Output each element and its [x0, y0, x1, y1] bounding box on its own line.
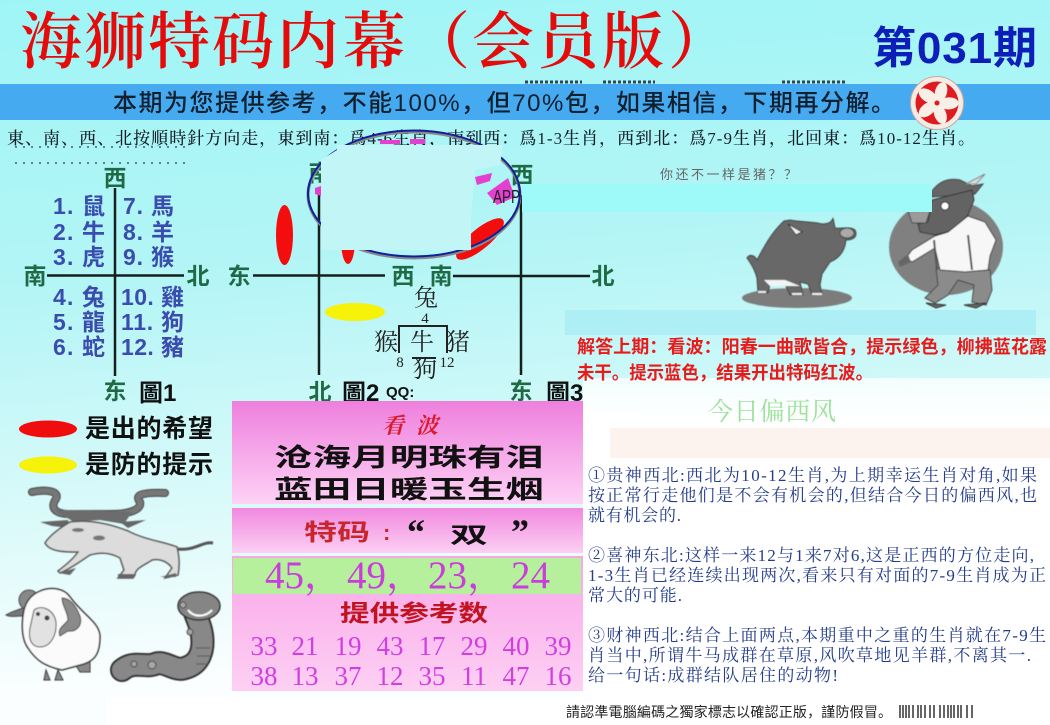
zodiac list: 12. 豬 [121, 334, 184, 360]
icon: sheep [6, 589, 100, 680]
reference numbers: 43 [376, 631, 404, 661]
analysis text block [588, 466, 1046, 685]
pig caption: 你还不一样是猪？？ [660, 167, 797, 182]
panel: special code: 特码 [304, 519, 370, 545]
paragraph 3: 给一句话:成群结队居住的动物! [588, 666, 838, 685]
figures 2 and 3: crosshairs: 圖3 [546, 380, 583, 407]
reference numbers: 37 [334, 661, 362, 691]
panel: numbers [232, 554, 583, 691]
small zodiac diagram: 8 [396, 355, 404, 371]
zodiac list: 6. 蛇 [53, 334, 105, 360]
figure captions: 圖2 [342, 380, 379, 407]
small zodiac diagram: 4 [421, 311, 429, 327]
reference heading: 提供参考数 [340, 600, 488, 626]
previous answer: 未干。提示蓝色，结果开出特码红波。 [577, 362, 873, 383]
paragraph 2 [588, 546, 1046, 605]
cross labels: 南 [430, 263, 452, 289]
red and yellow markers [276, 205, 509, 321]
blue banner [0, 84, 1050, 120]
reference numbers: 40 [502, 631, 530, 661]
panel: special code: ” [511, 512, 529, 552]
paragraph 1: 就有机会的. [588, 506, 681, 525]
zodiac list [53, 193, 184, 360]
reference numbers: 33 [250, 631, 278, 661]
icon: wild boar [742, 218, 856, 308]
panel: numbers: 23， [428, 554, 506, 597]
reference numbers: 38 [250, 661, 278, 691]
reference numbers: 17 [418, 631, 446, 661]
panel: numbers: 24 [511, 554, 550, 597]
cyan patches [522, 184, 932, 212]
paragraph 2: 1-3生肖已经连续出现两次,看来只有对面的7-9生肖成为正 [588, 566, 1046, 585]
small zodiac diagram [374, 285, 470, 383]
previous answer [577, 336, 1047, 383]
icon: pig man [889, 174, 1003, 308]
cross labels: 西 [392, 263, 414, 289]
panel: special code [232, 508, 583, 553]
reference numbers: 39 [544, 631, 572, 661]
reference numbers: 21 [292, 631, 318, 661]
paragraph 1: 按正常行走他们是不会有机会的,但结合今日的偏西风,也 [588, 486, 1037, 505]
legend [19, 415, 213, 479]
zodiac list: 5. 龍 [53, 309, 105, 335]
banner text: 本期为您提供参考，不能100%，但70%包，如果相信，下期再分解。 [113, 90, 895, 117]
paragraph 2: ②喜神东北:这样一来12与1来7对6,这是正西的方位走向, [588, 546, 1034, 565]
compass labels [24, 165, 210, 404]
panel: numbers: 49， [347, 554, 425, 597]
zodiac list: 9. 猴 [123, 244, 174, 270]
zodiac list: 11. 狗 [121, 309, 184, 335]
zodiac list: 3. 虎 [53, 244, 105, 270]
legend: 是防的提示 [85, 451, 213, 479]
reference numbers: 19 [334, 631, 362, 661]
figures 2 and 3: crosshairs [228, 160, 614, 407]
reference numbers: 47 [502, 661, 530, 691]
title: 海狮特码内幕（会员版） [20, 9, 730, 77]
reference numbers: 35 [418, 661, 446, 691]
cross labels: 西 [510, 162, 534, 188]
reference numbers: 29 [460, 631, 488, 661]
zodiac list: 7. 馬 [123, 193, 174, 219]
poem heading: 看波 [382, 413, 441, 438]
reference numbers: 13 [292, 661, 318, 691]
compass labels: 北 [186, 263, 210, 289]
poem lines: 沧海月明珠有泪 [274, 443, 544, 472]
zodiac list: 4. 兔 [53, 284, 105, 310]
small zodiac diagram: 猴 [374, 329, 398, 356]
small zodiac diagram: 牛 [410, 329, 434, 356]
panel: numbers: 45， [265, 554, 343, 597]
small zodiac diagram: 12 [440, 355, 454, 371]
paragraph 3: 肖当中,所谓牛马成群在草原,风吹草地见羊群,不离其一. [588, 645, 1031, 665]
reference numbers: 16 [544, 661, 572, 691]
panel: special code: : [383, 520, 390, 545]
cross labels: 北 [592, 263, 614, 289]
stamp ellipse with cover [308, 130, 520, 258]
issue number: 第031期 [872, 24, 1037, 73]
analysis heading: 今日偏西风 [708, 398, 836, 426]
legend: 是出的希望 [85, 415, 213, 443]
panel: special code: 双 [450, 523, 488, 548]
figures 2 and 3: crosshairs: QQ: [386, 384, 414, 401]
paragraph 3: ③财神西北:结合上面两点,本期重中之重的生肖就在7-9生 [588, 626, 1046, 645]
icon: snake [122, 592, 220, 670]
previous answer: 解答上期：看波：阳春一曲歌皆合，提示绿色，柳拂蓝花露 [577, 336, 1047, 357]
panel: poem [232, 401, 583, 504]
panel: poem: 蓝田日暖玉生烟 [274, 476, 544, 504]
stamp fragments [315, 139, 515, 205]
compass labels: 西 [104, 165, 126, 191]
zodiac list: 8. 羊 [123, 219, 174, 245]
paragraph 2: 常大的可能. [588, 586, 682, 605]
compass labels: 南 [24, 263, 46, 289]
figure 1: zodiac compass [24, 165, 210, 407]
stamp ellipse with cover: APP [493, 187, 520, 207]
zodiac list: 2. 牛 [53, 219, 105, 245]
pale band [610, 428, 1050, 458]
panel: special code: “ [407, 512, 425, 552]
icon: bull [32, 491, 213, 578]
cross labels: 北 [308, 379, 332, 405]
cross labels: 南 [308, 160, 332, 186]
paragraph 1 [588, 466, 1037, 525]
small zodiac diagram: 兔 [414, 285, 438, 312]
reference numbers [250, 631, 572, 691]
icon: Hong Kong emblem [910, 76, 964, 130]
barcode [900, 705, 972, 718]
paragraph 1: ①贵神西北:西北为10-12生肖,为上期幸运生肖对角,如果 [588, 466, 1037, 485]
small zodiac diagram: 猪 [446, 329, 470, 356]
cross labels [228, 160, 614, 405]
main numbers [233, 558, 581, 594]
cross labels: 东 [510, 378, 532, 404]
figure 1 caption: 圖1 [139, 380, 176, 407]
paragraph 3 [588, 626, 1046, 685]
small zodiac diagram: 狗 [413, 356, 437, 383]
zodiac list: 10. 雞 [121, 284, 184, 310]
zodiac list: 1. 鼠 [53, 193, 105, 219]
reference numbers: 11 [461, 661, 487, 691]
footer notice: 請認準電腦編碼之獨家標志以確認正版，謹防假冒。 [566, 704, 892, 720]
compass labels: 东 [104, 378, 126, 404]
direction rule text: 東、南、西、北按順時針方向走，東到南：爲4-6生肖，南到西：爲1-3生肖，西到北：爲7-9生肖，北回東：爲10-12生肖。 [7, 129, 975, 148]
reference numbers: 12 [376, 661, 404, 691]
cross labels: 东 [228, 263, 250, 289]
